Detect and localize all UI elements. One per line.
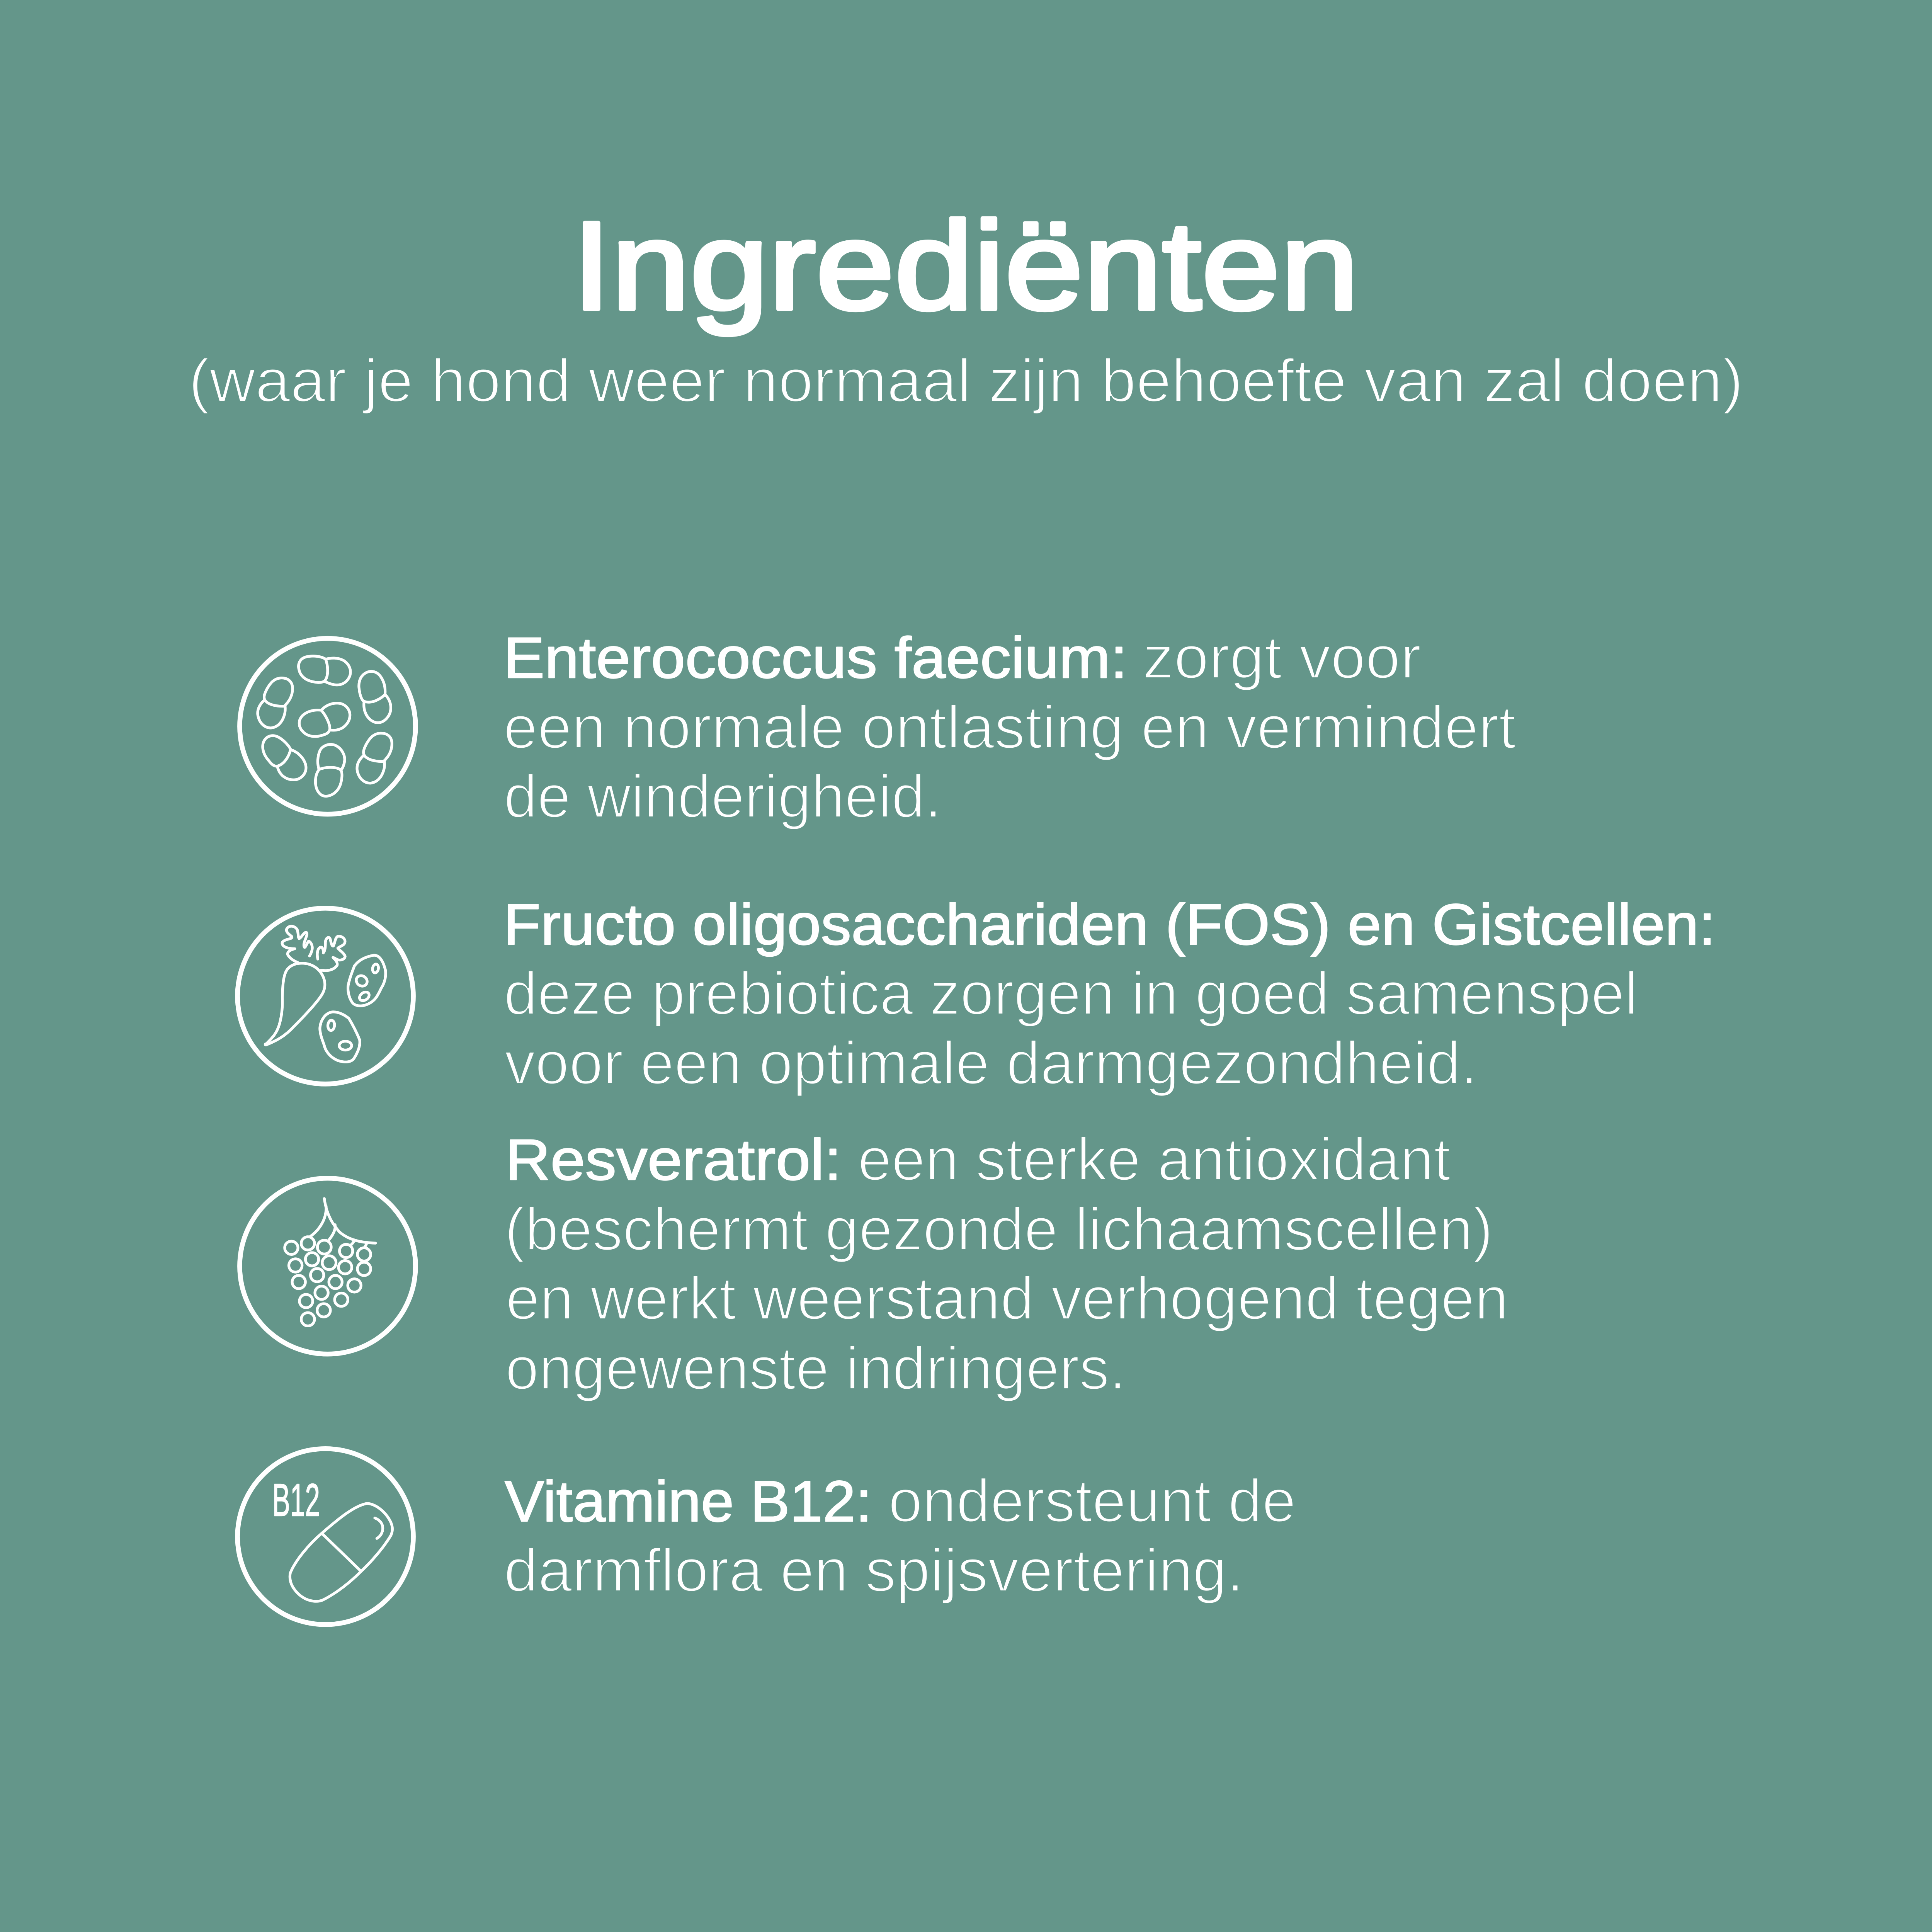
text block: Vitamine B12: darmflora en spijsvertering. xyxy=(504,1537,1244,1604)
text block: Vitamine B12: ondersteunt de xyxy=(888,1467,1296,1535)
text block: Resveratrol: (beschermt gezonde lichaamscellen) xyxy=(505,1196,1493,1263)
text block: Resveratrol: ongewenste indringers. xyxy=(505,1335,1126,1402)
text block: Enterococcus faecium: Enterococcus faecium: xyxy=(503,625,1128,690)
icon: B12 capsule: B12 xyxy=(272,1474,320,1526)
text block: Resveratrol xyxy=(505,1126,1509,1402)
text block: Resveratrol: en werkt weerstand verhogend tegen xyxy=(506,1265,1509,1332)
text block: Vitamine B12 xyxy=(504,1467,1296,1604)
icon: B12 capsule xyxy=(238,1449,413,1624)
text block: FOS and yeast cells: deze prebiotica zorgen in goed samenspel xyxy=(504,960,1638,1027)
title: Ingrediënten xyxy=(572,196,1359,337)
text block: Enterococcus faecium: de winderigheid. xyxy=(504,763,942,830)
text block: Enterococcus faecium: een normale ontlasting en vermindert xyxy=(503,694,1516,761)
text block: Enterococcus faecium xyxy=(503,624,1516,830)
text block: FOS and yeast cells: Fructo oligosacchariden (FOS) en Gistcellen: xyxy=(503,892,1716,957)
text block: Resveratrol: Resveratrol: xyxy=(505,1127,842,1192)
icon: bacteria xyxy=(240,638,415,814)
icon: grapes xyxy=(240,1178,415,1354)
text block: Resveratrol: een sterke antioxidant xyxy=(858,1126,1451,1193)
subtitle: (waar je hond weer normaal zijn behoefte van zal doen) xyxy=(189,347,1743,415)
text block: FOS and yeast cells: voor een optimale darmgezondheid. xyxy=(505,1029,1478,1097)
text block: Enterococcus faecium: zorgt voor xyxy=(1143,624,1421,691)
icon: carrot and yeast cells xyxy=(238,908,413,1084)
text block: Vitamine B12: Vitamine B12: xyxy=(505,1469,872,1534)
text block: FOS and yeast cells xyxy=(503,892,1716,1097)
